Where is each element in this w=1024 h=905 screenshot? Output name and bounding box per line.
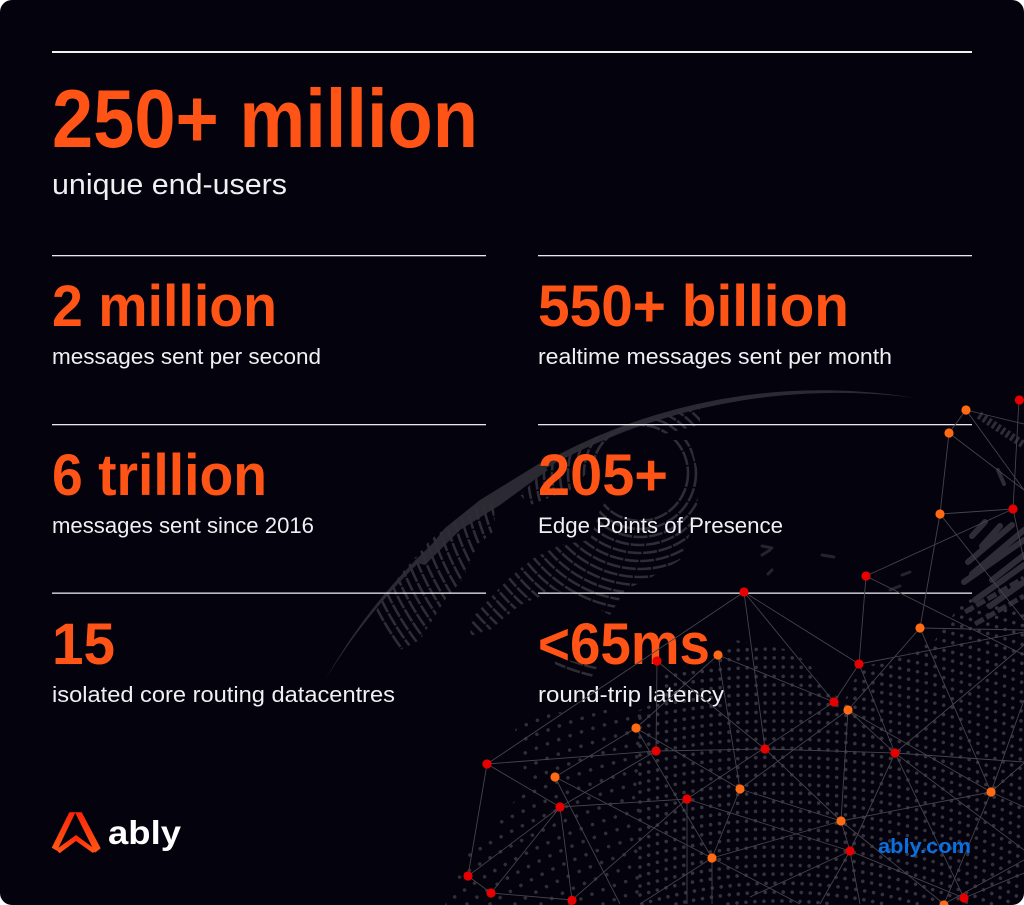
- right land stripes: [762, 415, 1024, 624]
- stat: 6 trillion: messages sent since 2016: [52, 513, 314, 538]
- rule row 3 right: [538, 592, 972, 594]
- stat: 550+ billion: realtime messages sent per month: [538, 344, 892, 369]
- stat: 15: 15: [52, 612, 115, 677]
- ably.com link: ably.com: [878, 835, 971, 858]
- network links: [468, 400, 1024, 904]
- rim coastline band: [417, 463, 548, 565]
- rule row 2 left: [52, 424, 486, 425]
- network graph: [463, 395, 1024, 905]
- stat: 15: isolated core routing datacentres: [52, 682, 395, 707]
- stat: 205+: Edge Points of Presence: [538, 513, 783, 538]
- stat: 6 trillion: 6 trillion: [52, 443, 267, 508]
- stat: 205+: [538, 443, 783, 538]
- globe rim: [325, 390, 915, 680]
- upper land stripes: [376, 409, 700, 676]
- top rule: [52, 51, 972, 53]
- stat: 250+ million: [52, 72, 478, 201]
- stat: 2 million: [52, 274, 321, 369]
- stat: 6 trillion: [52, 443, 314, 538]
- stat: 2 million: 2 million: [52, 274, 277, 339]
- stat: 2 million: messages sent per second: [52, 344, 321, 369]
- red nodes: [463, 395, 1024, 905]
- stat: <65ms: <65ms: [538, 612, 710, 677]
- stat: 550+ billion: 550+ billion: [538, 274, 849, 339]
- rule row 2 right: [538, 424, 972, 425]
- rule row 3 left: [52, 592, 486, 594]
- stat: <65ms: [538, 612, 725, 707]
- globe background: [325, 177, 1024, 904]
- lower land dots, sparse rows: [445, 710, 642, 905]
- lower land dots, dense rows: [640, 577, 1024, 904]
- rule row 1 right: [538, 255, 972, 256]
- stat: 15: [52, 612, 395, 707]
- orange nodes: [550, 405, 996, 905]
- stat: 550+ billion: [538, 274, 892, 369]
- ably wordmark: ably: [108, 814, 182, 851]
- icon: ably logo mark: [52, 812, 101, 853]
- stat: 205+: 205+: [538, 443, 668, 508]
- stat: 250+ million: unique end-users: [52, 169, 287, 201]
- stat: 250+ million: 250+ million: [52, 72, 478, 165]
- rule row 1 left: [52, 255, 486, 256]
- stat: <65ms: round-trip latency: [538, 682, 725, 707]
